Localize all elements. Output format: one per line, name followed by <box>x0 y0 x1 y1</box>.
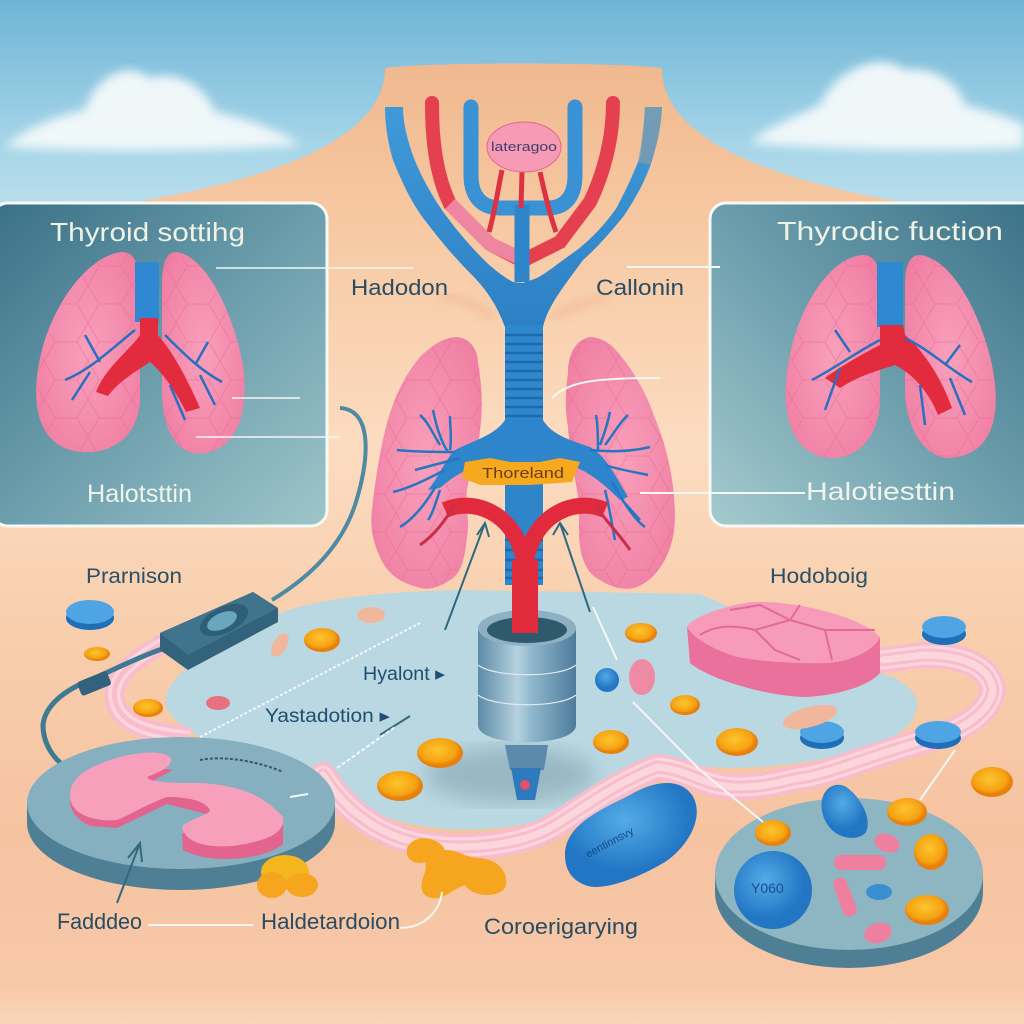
pink tablet right <box>687 602 880 697</box>
right panel caption: Halotiesttin <box>806 478 955 506</box>
red arms <box>432 103 613 258</box>
probe cylinder <box>478 600 576 800</box>
orange connector shape <box>407 838 506 898</box>
pink wavy band right <box>323 655 993 847</box>
outer Y fork <box>385 107 662 327</box>
larynx label <box>487 122 561 172</box>
pink capsules <box>832 830 902 946</box>
label: Coroerigarying: Coroerigarying <box>484 914 638 939</box>
label: Hadodon: Hadodon <box>351 275 448 300</box>
label: Hodoboig: Hodoboig <box>770 565 868 588</box>
cloud right <box>750 62 1024 150</box>
label: Haldetardoion: Haldetardoion <box>261 909 400 934</box>
right disc <box>715 785 983 968</box>
trachea and vessels <box>385 103 662 425</box>
lower trachea <box>505 480 543 585</box>
thyroid band <box>462 458 580 485</box>
blue pill with label: Y060 <box>751 880 784 896</box>
branching vessels right <box>590 412 650 540</box>
cloud left <box>5 70 300 151</box>
red arteries <box>420 505 630 632</box>
orange cluster <box>257 855 318 898</box>
left panel lungs <box>36 252 245 454</box>
label: Yastadotion: Yastadotion ▸ <box>265 706 391 727</box>
large central lungs <box>371 337 675 632</box>
thyroid band: Thoreland <box>482 465 564 482</box>
label: Callonin: Callonin <box>596 275 684 300</box>
arrows and leader lines <box>117 267 955 928</box>
label: Hyalont: Hyalont ▸ <box>363 664 445 685</box>
blue egg pill <box>821 785 868 838</box>
larynx label: lateragoo <box>491 139 557 154</box>
larynx connecting vessels <box>489 170 556 232</box>
cable <box>272 408 366 600</box>
floor blob <box>166 590 917 830</box>
right panel <box>710 203 1024 526</box>
blue inner U <box>471 107 575 208</box>
collarbone shading <box>440 295 610 318</box>
small pink and tan pills <box>206 607 840 734</box>
label: Fadddeo: Fadddeo <box>57 909 142 934</box>
lower cable <box>43 648 165 766</box>
pink wavy band left <box>114 640 190 737</box>
left panel caption: Halotsttin <box>87 480 192 508</box>
cylinder floor shadow <box>425 747 595 803</box>
grey fade on fork tip <box>638 107 662 165</box>
ribbed trachea <box>505 325 543 425</box>
right panel heading: Thyrodic fuction <box>777 216 1003 246</box>
blue bean pill: eentinnsvy <box>584 825 636 861</box>
branching vessels left <box>393 410 460 527</box>
blue pill with label <box>723 840 823 940</box>
loose blue pills <box>66 600 966 749</box>
left panel leaders <box>196 268 413 437</box>
handset <box>77 592 278 696</box>
left panel heading: Thyroid sottihg <box>50 217 245 247</box>
bronchus <box>428 420 628 500</box>
loose orange pills <box>84 623 1013 925</box>
sky background <box>0 0 1024 240</box>
left disc <box>27 737 335 890</box>
blue bean pill <box>565 783 697 887</box>
label: Prarnison: Prarnison <box>86 565 182 588</box>
right panel lungs <box>786 255 996 458</box>
left panel <box>0 203 413 526</box>
pink organ <box>70 752 283 859</box>
